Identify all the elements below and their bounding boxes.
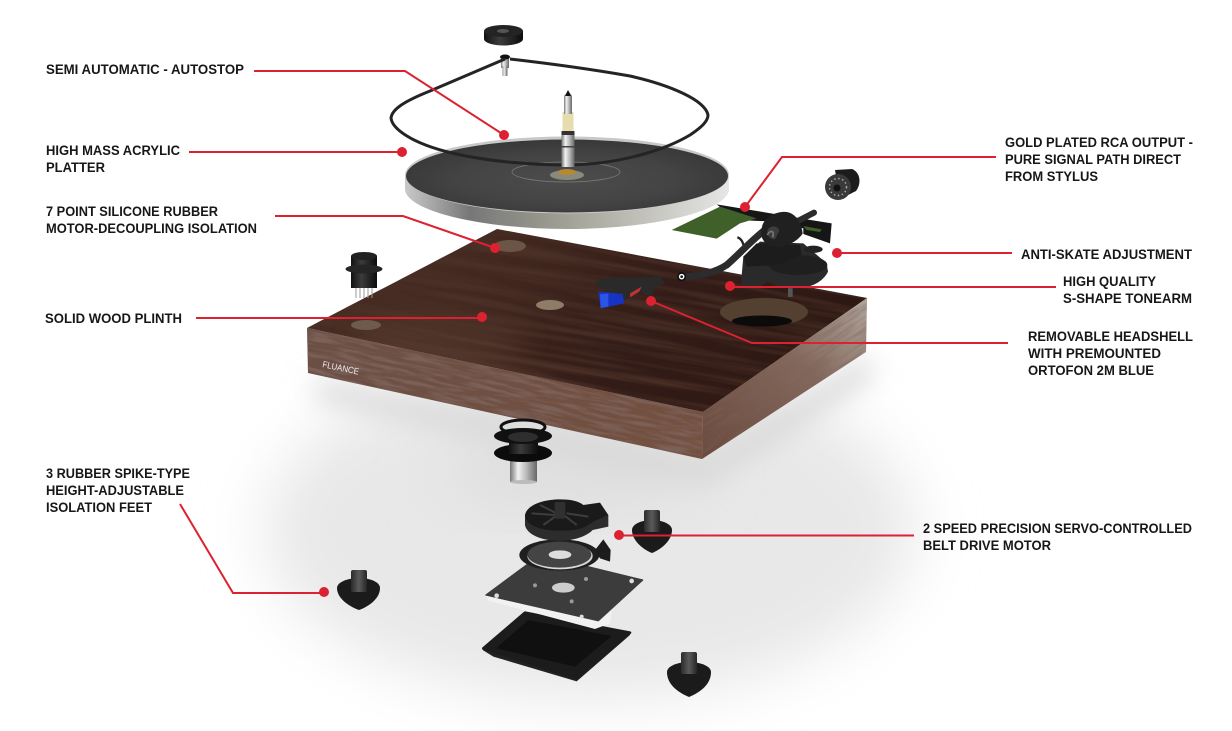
label: motor: 2 SPEED PRECISION SERVO-CONTROLLED [923,521,1192,536]
label: plinth: SOLID WOOD PLINTH [45,311,182,326]
headshell with cartridge [594,277,665,308]
leader: RCA output [740,157,996,212]
motor housing [525,499,608,541]
leader: tonearm [725,281,1056,291]
pivot head [761,212,803,247]
label: headshell: ORTOFON 2M BLUE [1028,363,1154,378]
finger lift [737,237,744,247]
leader: platter [189,147,407,157]
label: anti-skate: ANTI-SKATE ADJUSTMENT [1021,247,1193,262]
leader: motor [614,530,914,540]
label: motor: BELT DRIVE MOTOR [923,538,1051,553]
label: feet [46,466,190,515]
isolation foot: centre right [632,510,672,553]
label: RCA output: GOLD PLATED RCA OUTPUT - [1005,135,1193,150]
leader: headshell [646,296,1008,343]
main bearing [494,420,552,484]
soft floor shadow [265,356,915,700]
solid wood plinth [307,229,867,459]
spindle [562,90,574,167]
tonearm mount hole [720,298,808,326]
anti-skate knob [825,169,859,200]
motor assembly [483,499,643,681]
tonearm [678,212,828,297]
drive belt [391,59,708,165]
base body [741,242,828,288]
label: feet: 3 RUBBER SPIKE-TYPE [46,466,190,481]
plinth hole: front [351,320,381,330]
isolation foot: left [337,570,380,610]
leader: feet [180,504,329,597]
leader: anti-skate [832,248,1012,258]
counterweight rod [793,213,814,223]
label: feet: ISOLATION FEET [46,500,153,515]
plinth hole: centre [536,300,564,310]
S-shaped tube [683,231,764,277]
label: feet: HEIGHT-ADJUSTABLE [46,483,184,498]
label: isolation: MOTOR-DECOUPLING ISOLATION [46,221,257,236]
leader: isolation [275,216,500,253]
upper bearing connector [346,252,382,298]
label: tonearm: HIGH QUALITY [1063,274,1156,289]
metal mounting plate [486,555,643,629]
record weight [484,25,523,46]
tube end ring [678,273,685,280]
pivot post [788,285,793,297]
label: isolation [46,204,257,236]
leader: autostop [254,71,509,140]
isolation foot: bottom right [667,652,711,697]
label: platter [46,143,180,175]
label: isolation: 7 POINT SILICONE RUBBER [46,204,218,219]
FLUANCE logo: FLUANCE [322,359,360,377]
plinth hole: rear [494,240,526,252]
label: RCA output: FROM STYLUS [1005,169,1098,184]
label: platter: HIGH MASS ACRYLIC [46,143,180,158]
label: tonearm [1063,274,1192,306]
label: platter: PLATTER [46,160,105,175]
label: RCA output [1005,135,1193,184]
belt pulley [500,54,510,76]
base disc top [769,255,827,275]
motor mount disc [519,539,611,571]
leader: plinth [196,312,487,322]
label: headshell [1028,329,1193,378]
label: semi automatic: SEMI AUTOMATIC - AUTOSTOP [46,62,244,77]
label: headshell: WITH PREMOUNTED [1028,346,1161,361]
motor tray [483,613,630,681]
middle block [743,243,802,267]
label: motor [923,521,1192,553]
label: RCA output: PURE SIGNAL PATH DIRECT [1005,152,1182,167]
label: headshell: REMOVABLE HEADSHELL [1028,329,1193,344]
gold plated RCA circuit board [672,204,832,243]
label: tonearm: S-SHAPE TONEARM [1063,291,1192,306]
platter [405,136,729,229]
